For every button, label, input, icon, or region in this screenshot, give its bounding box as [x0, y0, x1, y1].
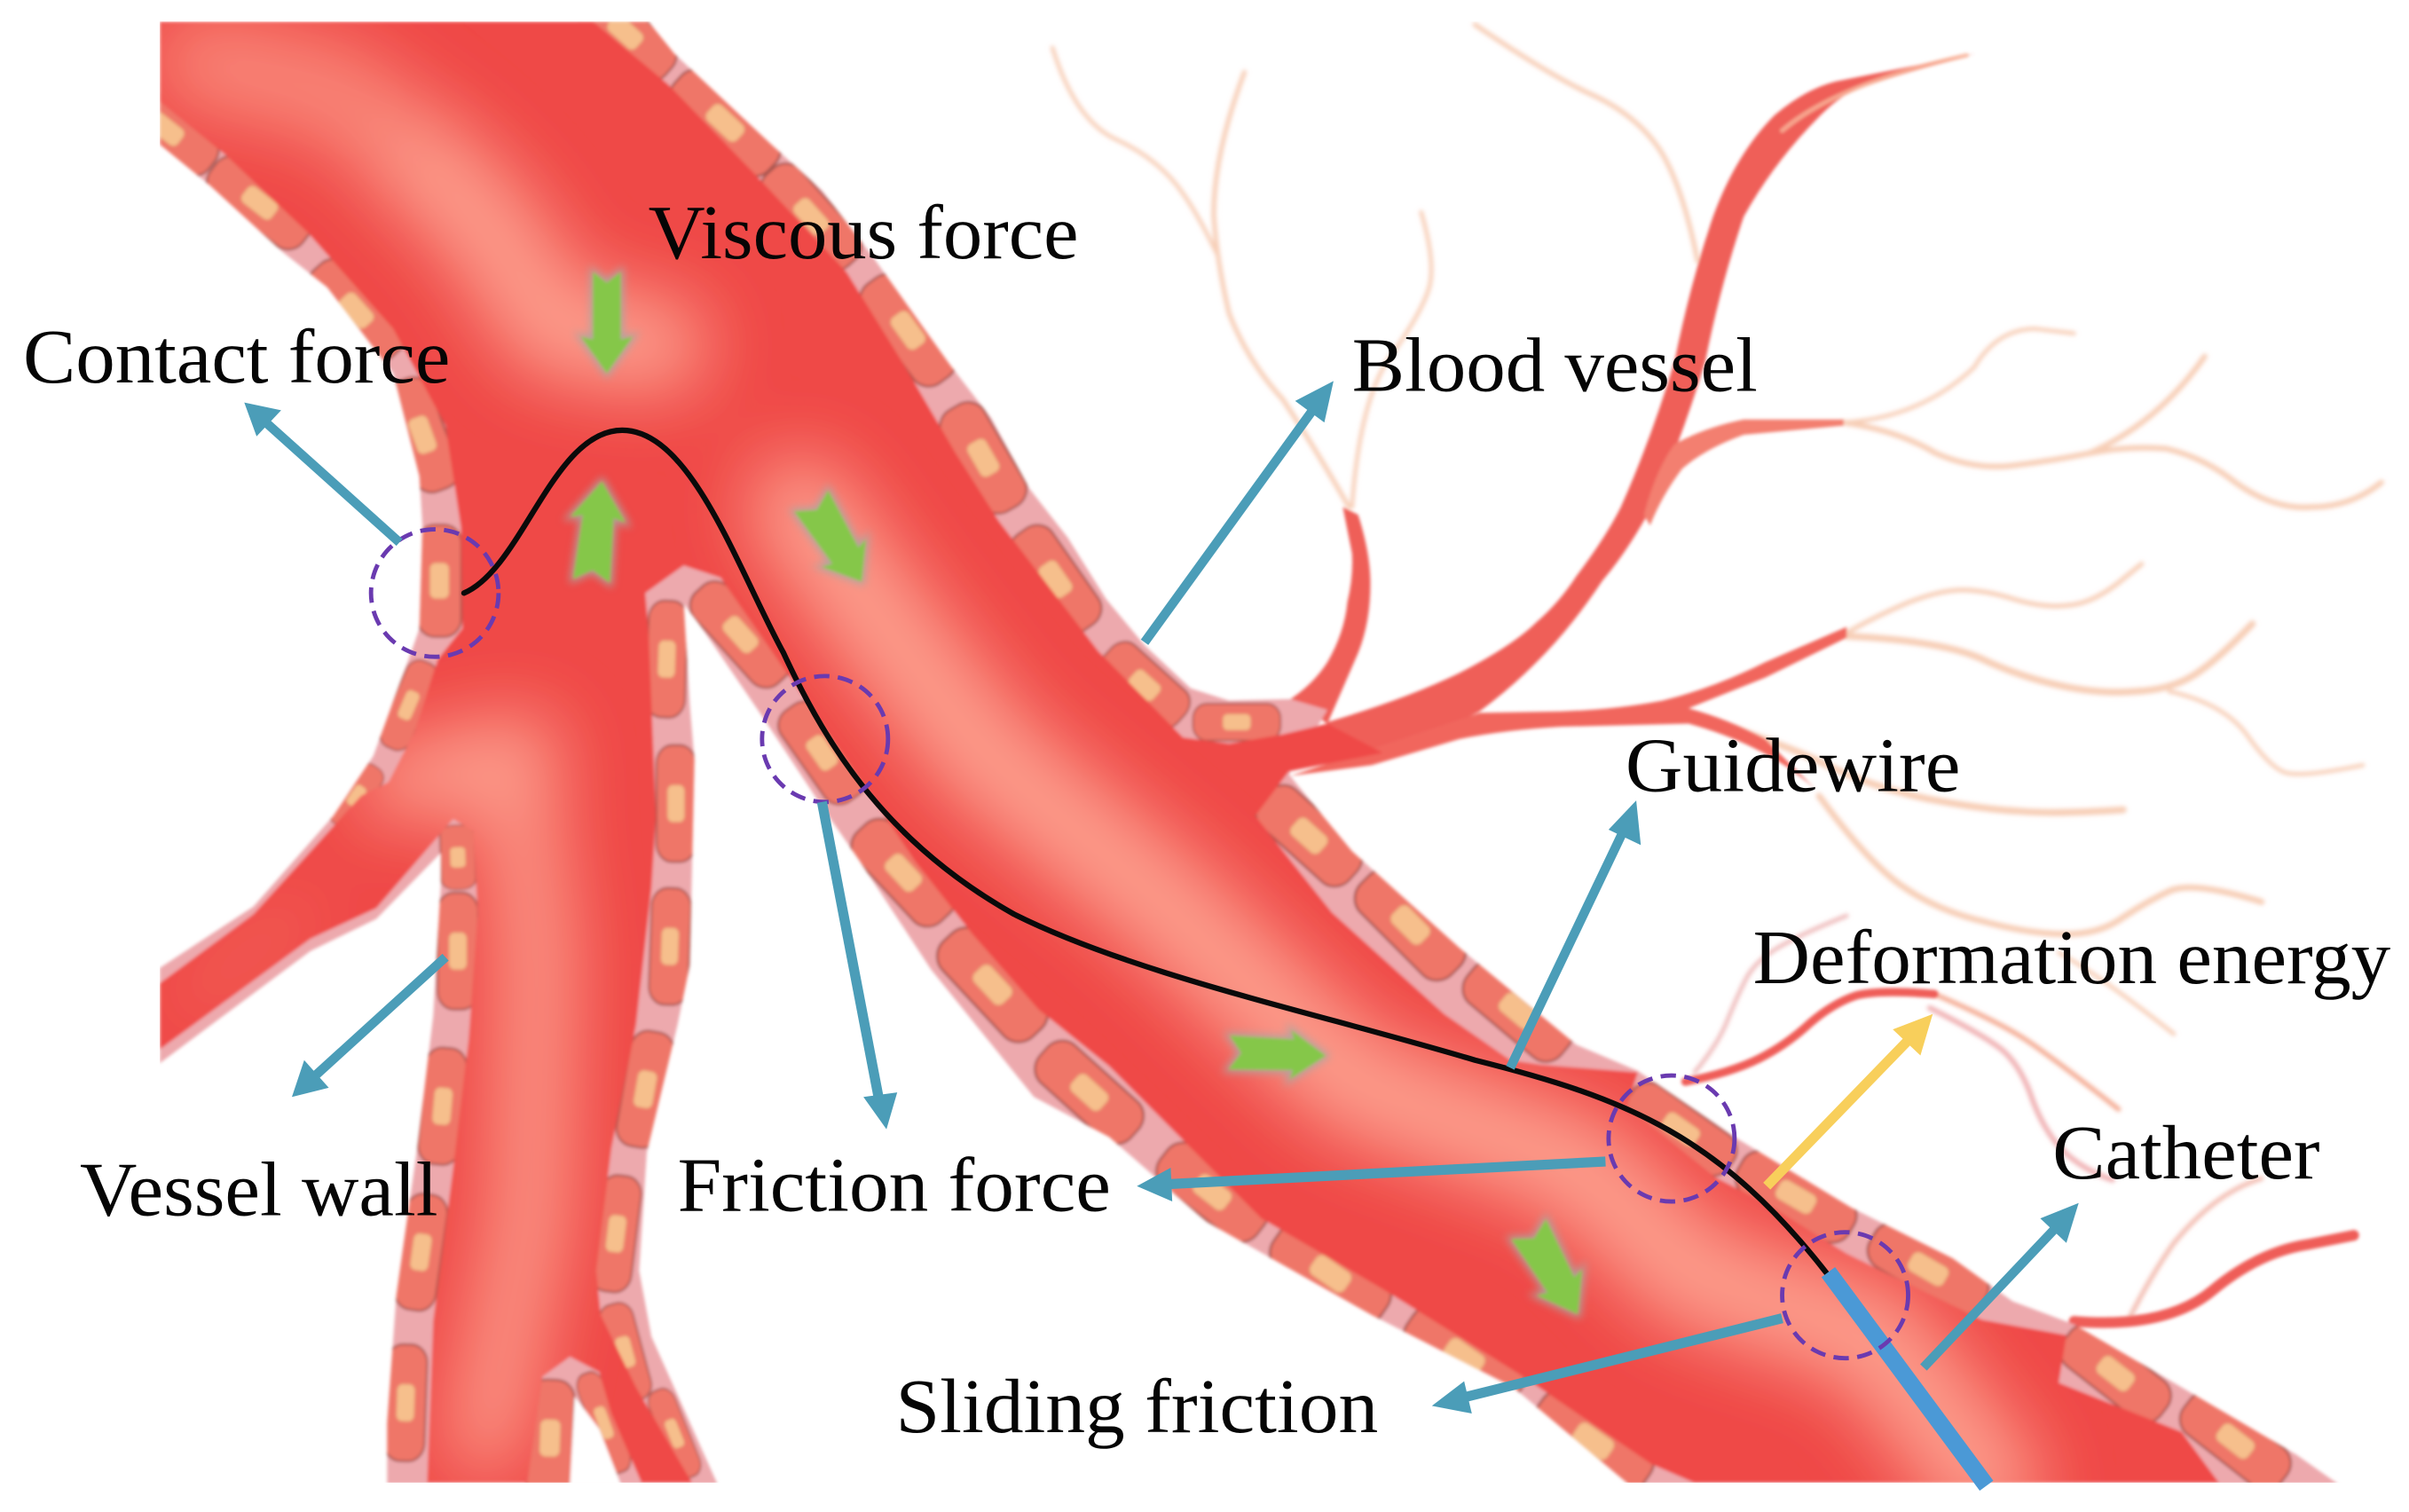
short upward branch	[1290, 507, 1371, 724]
thin peach capillaries	[1052, 25, 2381, 1321]
arrow: catheter	[1924, 1203, 2079, 1367]
arrow: vessel wall	[292, 957, 445, 1097]
catheter	[1828, 1272, 1987, 1485]
label: catheter: Catheter	[2052, 1110, 2320, 1195]
green arrow: viscous down	[581, 272, 633, 374]
label: friction force: Friction force	[678, 1142, 1111, 1227]
arrow: friction force down	[822, 802, 897, 1130]
circle: catheter tip	[1783, 1232, 1909, 1358]
fork slit	[570, 1397, 621, 1484]
green arrow: right	[1228, 1028, 1327, 1081]
circle: contact point	[371, 530, 499, 657]
label: blood vessel: Blood vessel	[1352, 323, 1758, 408]
label: vessel wall: Vessel wall	[80, 1147, 437, 1232]
circle: deformation point	[1609, 1075, 1735, 1201]
label: sliding friction: Sliding friction	[895, 1364, 1378, 1449]
arrow: blood vessel	[1145, 381, 1334, 642]
teal arrows	[244, 381, 2079, 1414]
lumen highlights	[185, 61, 1989, 1484]
guidewire	[464, 430, 1828, 1275]
arrow: friction force horizontal	[1137, 1162, 1605, 1201]
lower trunk branch	[1290, 626, 1846, 790]
purple dashed contact circles	[371, 530, 1909, 1358]
label: guidewire: Guidewire	[1626, 723, 1960, 808]
arrow: sliding friction	[1432, 1319, 1783, 1414]
arrow: contact force	[244, 403, 399, 542]
branch from mid trunk	[1644, 420, 1844, 525]
trunk branch to upper right	[1327, 54, 1974, 765]
green flow arrows	[564, 272, 1601, 1327]
circle: friction point	[762, 676, 888, 802]
medium red branches	[1685, 992, 2354, 1323]
capillary branches	[1052, 25, 2381, 1323]
label: viscous force: Viscous force	[649, 190, 1079, 275]
pale tip overlays	[1783, 55, 1966, 130]
label: contact force: Contact force	[23, 314, 450, 399]
arrow: guidewire	[1510, 800, 1641, 1067]
label: deformation energy: Deformation energy	[1753, 915, 2390, 1000]
green arrow: diagonal upper	[789, 487, 884, 595]
arrow: deformation energy	[1767, 1014, 1933, 1186]
green arrow: viscous up	[564, 478, 629, 584]
green arrow: diagonal lower	[1506, 1216, 1601, 1327]
